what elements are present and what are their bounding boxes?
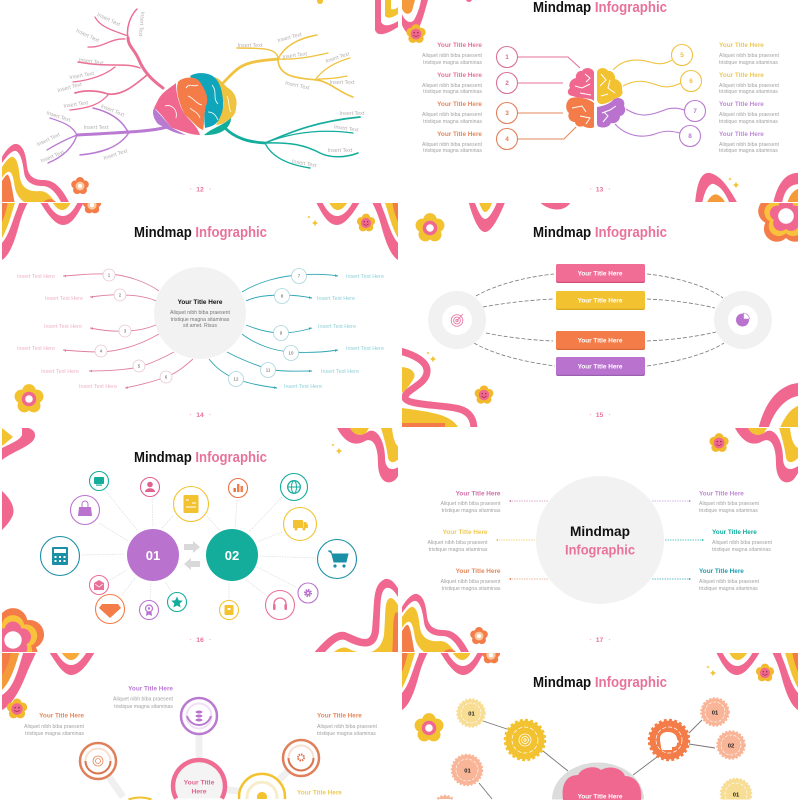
branch labels: Insert Text: [325, 51, 351, 65]
right text blocks: Aliquet nibh biba praesent: [719, 83, 780, 89]
big yellow gear: [506, 720, 544, 760]
right text blocks: tristique magna sitaminas: [719, 148, 778, 154]
decoration: [400, 646, 800, 741]
teal labels: Insert Text Here: [346, 274, 384, 280]
hub 02: 02: [225, 548, 239, 563]
pink labels: Insert Text Here: [79, 384, 117, 390]
right text blocks: Your Title Here: [719, 131, 764, 138]
left items: Your Title Here: [456, 490, 501, 498]
page number: 15: [596, 412, 603, 419]
text: left orange: [24, 712, 85, 737]
node numbers: 6: [165, 374, 168, 380]
circle numbers: 6: [689, 78, 693, 85]
right text blocks: Your Title Here: [719, 101, 764, 108]
slide 15: dashed links between icons: [400, 187, 800, 430]
left orange node: [80, 743, 116, 779]
branch labels: Insert Text: [36, 132, 62, 148]
pink arrowheads: [63, 275, 128, 389]
circle numbers: 2: [505, 80, 509, 87]
title: Mindmap Infographic: [533, 675, 667, 691]
left text blocks: Aliquet nibh biba praesent: [422, 142, 483, 148]
page number: 14: [196, 412, 204, 419]
centre text: [170, 299, 231, 329]
text: right orange: Your Title Here: [317, 712, 362, 720]
page number: [190, 637, 211, 644]
node numbers: 8: [281, 294, 284, 298]
branch labels: Insert Text: [282, 51, 308, 61]
circle numbers: 3: [505, 110, 509, 117]
node numbers: 11: [266, 368, 271, 372]
pink branches: [70, 9, 163, 110]
right hub with pie icon: [714, 291, 772, 349]
yellow left node: [128, 798, 152, 800]
gear numbers: 01: [712, 710, 719, 716]
left items: Aliquet nibh biba praesent: [440, 501, 501, 507]
page number: 12: [196, 186, 204, 194]
branch labels: Insert Text: [63, 100, 89, 110]
left items: tristique magna sitaminas: [429, 547, 488, 553]
text: left orange: tristique magna sitaminas: [25, 731, 84, 737]
right items: tristique magna sitaminas: [712, 547, 771, 553]
dotted arrows: [497, 501, 703, 579]
branch labels: [36, 11, 365, 169]
title: Mindmap Infographic: [134, 225, 267, 241]
centre text: Aliquet nibh biba praesent: [170, 310, 231, 316]
teal labels: Insert Text Here: [346, 346, 384, 352]
node numbers: 12: [234, 376, 239, 382]
branch labels: Insert Text: [330, 80, 355, 86]
left items: Aliquet nibh biba praesent: [428, 540, 488, 546]
slide 12: brain mindmap: [2, 0, 398, 204]
slide 16: two hubs with icons: [0, 425, 400, 669]
decoration: bottom-left wave and flower: [2, 0, 398, 204]
left text blocks: Aliquet nibh biba praesent: [422, 112, 483, 118]
decoration: [0, 650, 96, 718]
right text blocks: tristique magna sitaminas: [719, 60, 778, 66]
right items: Your Title Here: [712, 529, 757, 536]
pink labels: Insert Text Here: [45, 296, 83, 302]
left text blocks: Your Title Here: [437, 131, 482, 138]
right items: Your Title Here: [699, 490, 744, 498]
slide 13: brain with numbered lines: [400, 0, 800, 204]
branch labels: Insert Text: [103, 148, 129, 162]
decoration: [0, 425, 400, 669]
node circles: [95, 268, 306, 386]
centre circle: [536, 476, 664, 604]
branch labels: Insert Text: [328, 148, 353, 154]
decoration: [400, 187, 800, 430]
right orange node: [283, 740, 319, 776]
branch labels: Insert Text: [340, 111, 365, 117]
page number: [190, 186, 211, 194]
text: purple: Aliquet nibh biba praesent: [113, 696, 174, 702]
centre node: Your Title: [184, 780, 215, 786]
branch labels: Insert Text: [277, 32, 303, 44]
right text blocks: Aliquet nibh biba praesent: [719, 142, 780, 148]
branch labels: Insert Text: [84, 125, 109, 131]
node numbers: 1: [108, 272, 111, 278]
left hub with target icon: [428, 291, 486, 349]
icon circles: [40, 472, 356, 624]
circle numbers: 8: [688, 133, 692, 140]
node numbers: 2: [119, 292, 122, 298]
left items: Your Title Here: [443, 529, 488, 536]
left text blocks: tristique magna sitaminas: [423, 148, 482, 154]
gear numbers: 02: [728, 744, 734, 750]
centre text: Your Title Here: [178, 299, 223, 306]
slide 19: gears mindmap: [400, 646, 800, 800]
left text blocks: Aliquet nibh biba praesent: [422, 53, 483, 59]
node numbers: 10: [289, 350, 294, 356]
right text blocks: tristique magna sitaminas: [719, 119, 778, 125]
node numbers: 9: [280, 330, 283, 336]
gear numbers: 01: [468, 712, 475, 718]
icons: [52, 477, 348, 618]
arrow tips: [496, 500, 704, 580]
page number: [590, 637, 610, 644]
title: Mindmap Infographic: [134, 450, 267, 466]
page number: 17: [596, 637, 603, 644]
right text blocks: Your Title Here: [719, 42, 764, 49]
branch labels: Insert Text: [78, 57, 104, 67]
gear numbers: 01: [733, 792, 740, 798]
centre title: Infographic: [565, 542, 635, 558]
page number: [590, 186, 610, 194]
centre node: Here: [191, 788, 207, 796]
teal arrowheads: [274, 274, 338, 389]
centre text: sit amet. Risus: [183, 323, 217, 329]
right items: Your Title Here: [699, 568, 744, 575]
right text blocks: [719, 42, 780, 154]
node numbers: [100, 272, 301, 382]
node numbers: 7: [298, 274, 301, 278]
right text blocks: Aliquet nibh biba praesent: [719, 112, 780, 118]
teal branches: [225, 117, 360, 168]
left text blocks: tristique magna sitaminas: [423, 119, 482, 125]
left text blocks: Aliquet nibh biba praesent: [422, 83, 483, 89]
branch labels: Insert Text: [238, 43, 263, 49]
text: right orange: Aliquet nibh biba praesent: [317, 724, 378, 730]
left items: Your Title Here: [456, 568, 501, 575]
circle numbers: 4: [505, 136, 509, 143]
left items: [428, 490, 501, 592]
teal labels: Insert Text Here: [318, 324, 356, 330]
teal labels: Insert Text Here: [284, 384, 322, 390]
left text blocks: Your Title Here: [437, 72, 482, 79]
box labels: Your Title Here: [578, 298, 623, 304]
branch labels: Insert Text: [75, 28, 100, 44]
small gears: [437, 698, 751, 799]
slide 17: central title with six items: [402, 428, 798, 654]
text: purple: [113, 686, 174, 710]
right items: tristique magna sitaminas: [699, 508, 758, 514]
branch labels: Insert Text: [69, 71, 95, 81]
node numbers: 5: [138, 364, 141, 368]
slide 14: central circle with arrows: [0, 196, 400, 419]
branch labels: Insert Text: [46, 110, 71, 124]
box labels: Your Title Here: [578, 338, 623, 344]
branch labels: Insert Text: [291, 159, 317, 169]
page number: 13: [596, 186, 603, 194]
left text blocks: Your Title Here: [437, 101, 482, 108]
branch labels: Insert Text: [40, 149, 66, 164]
hub 01: 01: [146, 548, 160, 563]
brain: colourful: [153, 73, 237, 135]
pink labels: Insert Text Here: [44, 324, 82, 330]
branch labels: Insert Text: [333, 124, 359, 134]
text: right orange: [317, 712, 378, 737]
connectors: [98, 735, 301, 797]
title: Mindmap Infographic: [533, 0, 667, 16]
right items: [699, 490, 773, 592]
right text blocks: Your Title Here: [719, 72, 764, 79]
teal arrows: [209, 274, 338, 388]
dashed links: [474, 274, 724, 366]
central cloud: [552, 762, 644, 800]
branch labels: Insert Text: [57, 82, 83, 94]
gear numbers: 01: [464, 768, 471, 774]
left text blocks: Your Title Here: [437, 42, 482, 49]
numbered circles: [496, 44, 706, 150]
connector lines: [479, 720, 715, 799]
centre title: [565, 523, 635, 558]
left items: Aliquet nibh biba praesent: [440, 579, 501, 585]
branch labels: Insert Text: [284, 81, 310, 92]
branch labels: Insert Text: [96, 12, 121, 28]
right items: Aliquet nibh biba praesent: [712, 540, 773, 546]
text: right orange: tristique magna sitaminas: [317, 731, 376, 737]
title: Mindmap Infographic: [533, 225, 667, 241]
page number: [190, 412, 211, 419]
circle numbers: 1: [505, 54, 509, 61]
pink labels: Insert Text Here: [17, 274, 55, 280]
hub 01: [127, 529, 179, 581]
purple node: [181, 698, 217, 734]
big orange gear: [650, 720, 688, 760]
teal labels: Insert Text Here: [321, 369, 359, 375]
node numbers: 3: [124, 328, 127, 334]
yellow right node: [239, 774, 285, 799]
left items: tristique magna sitaminas: [442, 586, 501, 592]
text: yellow: Your Title Here: [297, 790, 342, 796]
branch labels: Insert Text: [100, 104, 125, 119]
right text blocks: Aliquet nibh biba praesent: [719, 53, 780, 59]
decoration: [0, 196, 400, 412]
decoration: corners: [400, 0, 800, 204]
box labels: [578, 270, 623, 370]
teal labels: [284, 274, 384, 390]
node numbers: 4: [100, 348, 103, 354]
right items: Aliquet nibh biba praesent: [699, 501, 760, 507]
pink labels: Insert Text Here: [17, 346, 55, 352]
pink labels: [17, 274, 117, 390]
text: purple: Your Title Here: [128, 686, 173, 692]
yellow branches: [223, 35, 353, 97]
branch labels: Insert Text: [137, 11, 145, 37]
teal labels: Insert Text Here: [317, 296, 355, 302]
centre circle: [154, 267, 246, 359]
left text blocks: tristique magna sitaminas: [423, 89, 482, 95]
right items: tristique magna sitaminas: [699, 586, 758, 592]
circle numbers: 7: [693, 108, 697, 115]
brain: four lobes: [566, 68, 625, 128]
left items: tristique magna sitaminas: [442, 508, 501, 514]
slide 18: ring nodes: [0, 650, 378, 800]
pink labels: Insert Text Here: [41, 369, 79, 375]
text: purple: tristique magna sitaminas: [114, 704, 173, 710]
centre node: [173, 760, 225, 798]
title boxes: [556, 264, 645, 376]
circle numbers: 5: [680, 52, 684, 59]
arrows between hubs: [184, 541, 200, 570]
box labels: Your Title Here: [578, 364, 623, 370]
text: left orange: Aliquet nibh biba praesent: [24, 724, 85, 730]
gear numbers: [464, 710, 740, 798]
hub 02: [206, 529, 258, 581]
centre text: tristique magna sitaminas: [171, 317, 230, 323]
left text blocks: [422, 42, 483, 154]
decoration: [402, 428, 798, 654]
connector lines: [518, 57, 685, 139]
page number: [590, 412, 610, 419]
left text blocks: tristique magna sitaminas: [423, 60, 482, 66]
centre title: Mindmap: [570, 523, 630, 539]
text: left orange: Your Title Here: [39, 712, 84, 720]
right items: Aliquet nibh biba praesent: [699, 579, 760, 585]
purple branches: [47, 108, 167, 163]
right text blocks: tristique magna sitaminas: [719, 89, 778, 95]
dashed connector lines: [82, 490, 316, 600]
pink arrows: [63, 274, 193, 388]
circle numbers: [505, 52, 697, 143]
box labels: Your Title Here: [578, 270, 623, 278]
page number: 16: [196, 637, 204, 644]
